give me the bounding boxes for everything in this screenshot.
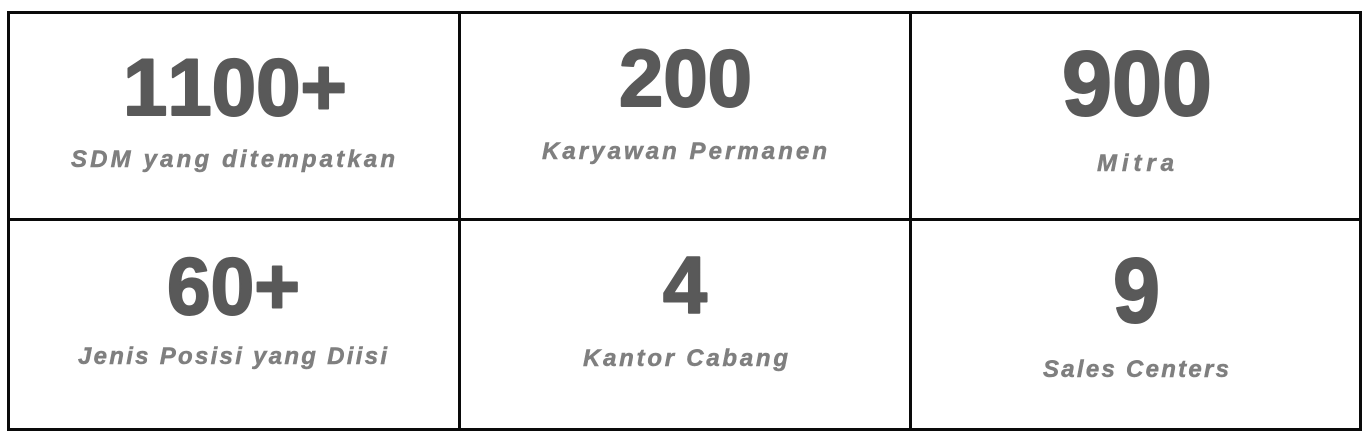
panel: Mitra [1062, 33, 1212, 177]
panel: SDM yang ditempatkan [71, 43, 395, 173]
panel: SDM yang ditempatkan: SDM yang ditempatkan [71, 146, 395, 173]
panel: SDM yang ditempatkan: 1100+ [123, 43, 347, 133]
panel: Mitra: 900 [1062, 33, 1212, 135]
panel: Jenis Posisi yang Diisi [78, 242, 388, 370]
panel: Karyawan Permanen [542, 34, 827, 165]
panel: Karyawan Permanen: Karyawan Permanen [542, 138, 827, 165]
panel: Kantor Cabang [583, 241, 788, 372]
panel: Sales Centers: 9 [1113, 240, 1160, 342]
panel: Kantor Cabang: 4 [663, 241, 707, 331]
panel: Kantor Cabang: Kantor Cabang [583, 345, 788, 372]
panel: Mitra: Mitra [1097, 150, 1174, 177]
panel: Sales Centers: Sales Centers [1043, 356, 1229, 383]
panel: Karyawan Permanen: 200 [619, 34, 752, 124]
panel: Jenis Posisi yang Diisi: Jenis Posisi yang Diisi [78, 343, 388, 370]
panel: Sales Centers [1043, 240, 1229, 383]
panel: Jenis Posisi yang Diisi: 60+ [167, 242, 300, 332]
